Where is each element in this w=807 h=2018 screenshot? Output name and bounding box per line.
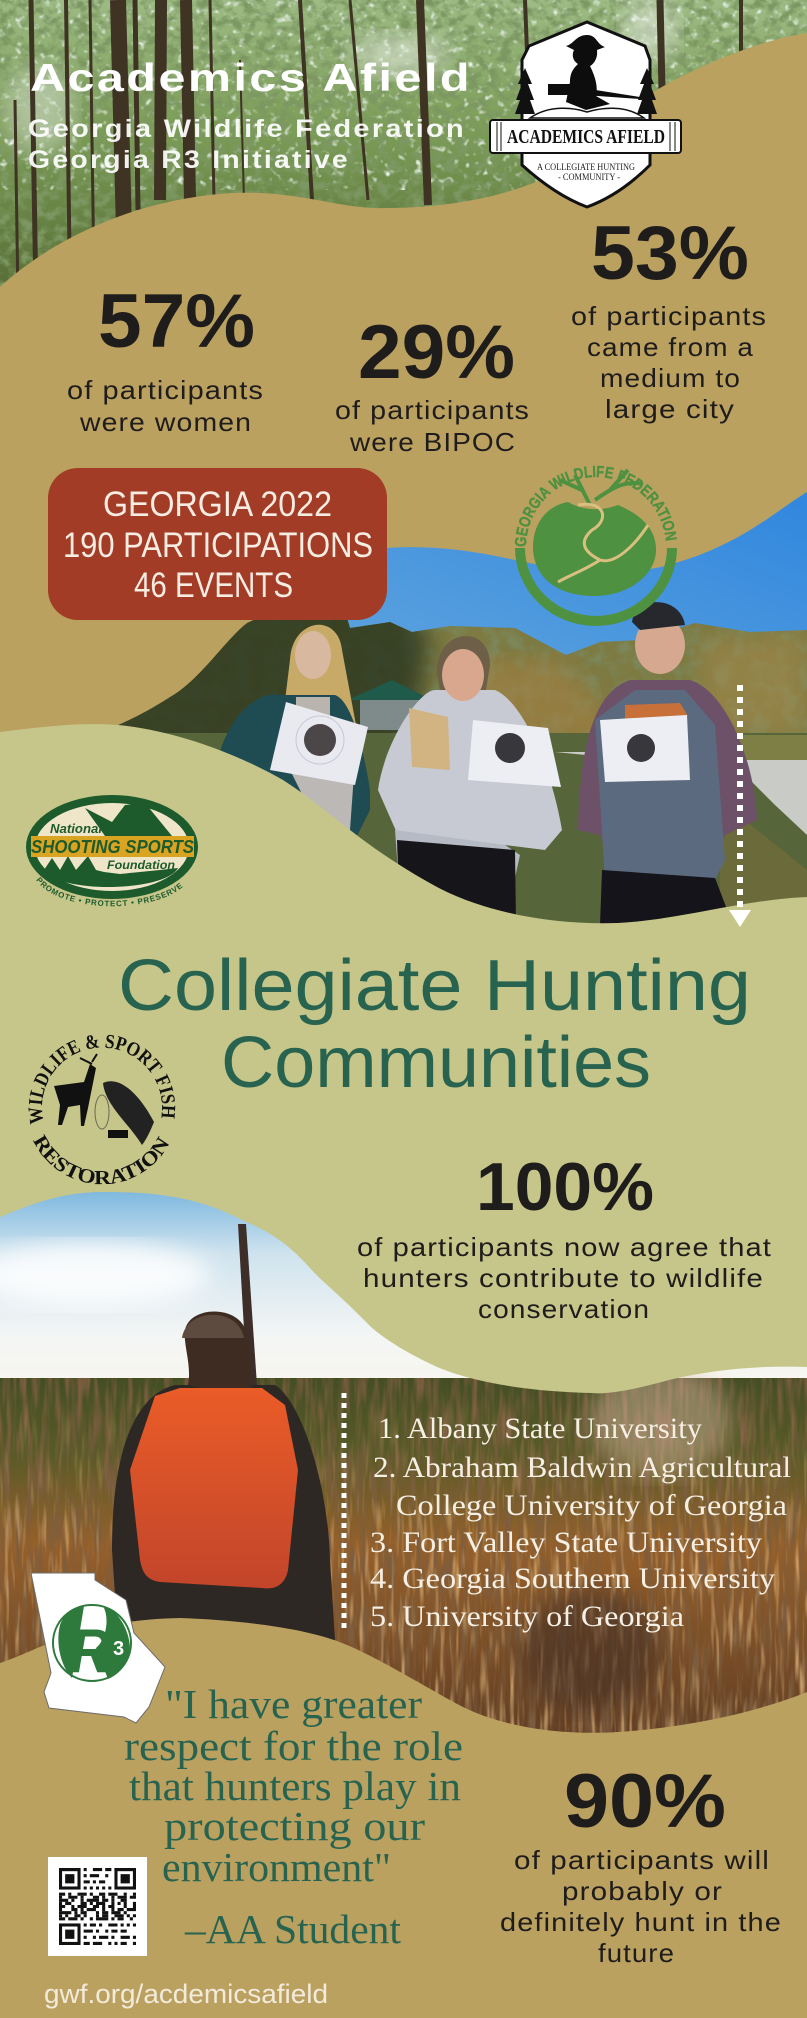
logo: Academics Afield shield	[490, 22, 681, 207]
logo: Georgia Wildlife Federation	[514, 466, 677, 626]
stat: 57% women: 57%	[98, 279, 255, 364]
stat: 57% women: of participants	[67, 375, 264, 405]
QR code	[48, 1857, 147, 1956]
stat: 29% BIPOC: were BIPOC	[349, 427, 516, 457]
web address: gwf.org/acdemicsafield	[44, 1979, 328, 2009]
heading: Collegiate Hunting Communities: Communities	[221, 1023, 651, 1103]
subtitle: Georgia R3 Initiative	[28, 146, 350, 174]
stat: 29% BIPOC	[335, 310, 530, 457]
quote: respect for the role	[124, 1723, 463, 1769]
stat: 100% conservation: 100%	[476, 1149, 654, 1225]
stat: 100% conservation: conservation	[478, 1294, 650, 1324]
panel: lower tan background	[0, 1618, 807, 2018]
panel: upper tan background	[0, 33, 807, 745]
list: participating universities: 4. Georgia Southern University	[370, 1562, 775, 1595]
logo: National Shooting Sports Foundation	[26, 795, 198, 906]
hunter figure	[112, 1224, 335, 1640]
heading: Collegiate Hunting Communities: Collegiate Hunting	[118, 946, 751, 1026]
subtitle: Georgia Wildlife Federation	[28, 115, 466, 143]
quote	[124, 1681, 463, 1952]
heading: Collegiate Hunting Communities	[118, 946, 751, 1103]
stat: 57% women	[67, 279, 264, 437]
photo: pine forest	[0, 0, 807, 300]
photo: hunter in orange vest	[0, 1180, 807, 1748]
stat: 29% BIPOC: of participants	[335, 395, 530, 425]
list: participating universities: 1. Albany State University	[378, 1412, 702, 1445]
icon: Georgia map with R3 logo	[31, 1573, 165, 1723]
logo: Wildlife and Sport Fish Restoration: RESTORATION	[33, 1134, 169, 1184]
stat: 90% future hunting: probably or	[562, 1876, 723, 1906]
quote: protecting our	[164, 1803, 425, 1849]
list: participating universities: 2. Abraham Baldwin Agricultural	[373, 1451, 791, 1484]
stat: 57% women: were women	[79, 407, 252, 437]
stat: 90% future hunting: 90%	[564, 1759, 726, 1844]
callout: Georgia 2022: 190 PARTICIPATIONS	[63, 526, 373, 565]
quote: that hunters play in	[129, 1763, 461, 1809]
subtitle	[28, 115, 466, 174]
logo: National Shooting Sports Foundation: Foundation	[107, 858, 175, 872]
quote: –AA Student	[184, 1906, 402, 1952]
list: participating universities: College University of Georgia	[396, 1489, 787, 1522]
logo: Academics Afield shield: A COLLEGIATE HUNTING	[537, 162, 635, 172]
stat: 100% conservation	[357, 1149, 772, 1324]
arrow: dotted down arrow	[729, 685, 751, 927]
logo: Wildlife and Sport Fish Restoration	[28, 1034, 176, 1184]
logo: Academics Afield shield: - COMMUNITY -	[558, 172, 620, 182]
logo: National Shooting Sports Foundation: SHOOTING SPORTS	[31, 837, 194, 857]
callout: Georgia 2022: 46 EVENTS	[134, 566, 293, 605]
callout: Georgia 2022	[48, 468, 387, 620]
list: participating universities	[370, 1412, 791, 1633]
title: Academics Afield	[30, 57, 472, 100]
stat: 53% city: 53%	[591, 211, 749, 296]
stat: 29% BIPOC: 29%	[358, 310, 515, 395]
stat: 100% conservation: hunters contribute to wildlife	[363, 1263, 764, 1293]
logo: National Shooting Sports Foundation: PROMOTE • PROTECT • PRESERVE	[36, 877, 183, 906]
logo: Academics Afield shield: ACADEMICS AFIELD	[507, 126, 665, 148]
quote: environment"	[162, 1844, 391, 1890]
person: woman in grey hoodie	[378, 636, 562, 925]
tree line	[118, 620, 807, 733]
stat: 53% city: medium to	[600, 363, 741, 393]
grass and road	[120, 733, 807, 938]
callout: Georgia 2022: GEORGIA 2022	[103, 485, 332, 524]
stat: 90% future hunting	[500, 1759, 782, 1968]
stat: 90% future hunting: future	[598, 1938, 675, 1968]
divider: dotted vertical line	[342, 1393, 346, 1632]
person: man in cap and raglan shirt	[578, 602, 757, 925]
icon: Georgia map with R3 logo: 3	[113, 1638, 124, 1660]
stat: 53% city: large city	[605, 394, 735, 424]
photo: three participants holding targets	[118, 492, 807, 924]
targets	[270, 702, 690, 787]
quote: "I have greater	[165, 1681, 422, 1727]
panel: sage green background	[0, 724, 807, 1393]
shelter	[348, 680, 432, 730]
stat: 53% city: of participants	[571, 301, 767, 331]
stat: 53% city: came from a	[587, 332, 754, 362]
person: woman in teal jacket	[215, 625, 370, 870]
logo: Wildlife and Sport Fish Restoration: WILDLIFE & SPORT FISH	[28, 1034, 176, 1124]
list: participating universities: 3. Fort Valley State University	[370, 1526, 762, 1559]
icon: Georgia map with R3 logo: R	[70, 1617, 110, 1686]
logo: National Shooting Sports Foundation: National	[50, 821, 102, 836]
stat: 53% city	[571, 211, 767, 424]
stat: 90% future hunting: definitely hunt in the	[500, 1907, 782, 1937]
stat: 100% conservation: of participants now agree that	[357, 1232, 772, 1262]
orange vest	[130, 1388, 298, 1588]
logo: Georgia Wildlife Federation: GEORGIA WILDLIFE FEDERATION	[514, 466, 677, 546]
list: participating universities: 5. University of Georgia	[370, 1600, 684, 1633]
stat: 90% future hunting: of participants will	[514, 1845, 770, 1875]
